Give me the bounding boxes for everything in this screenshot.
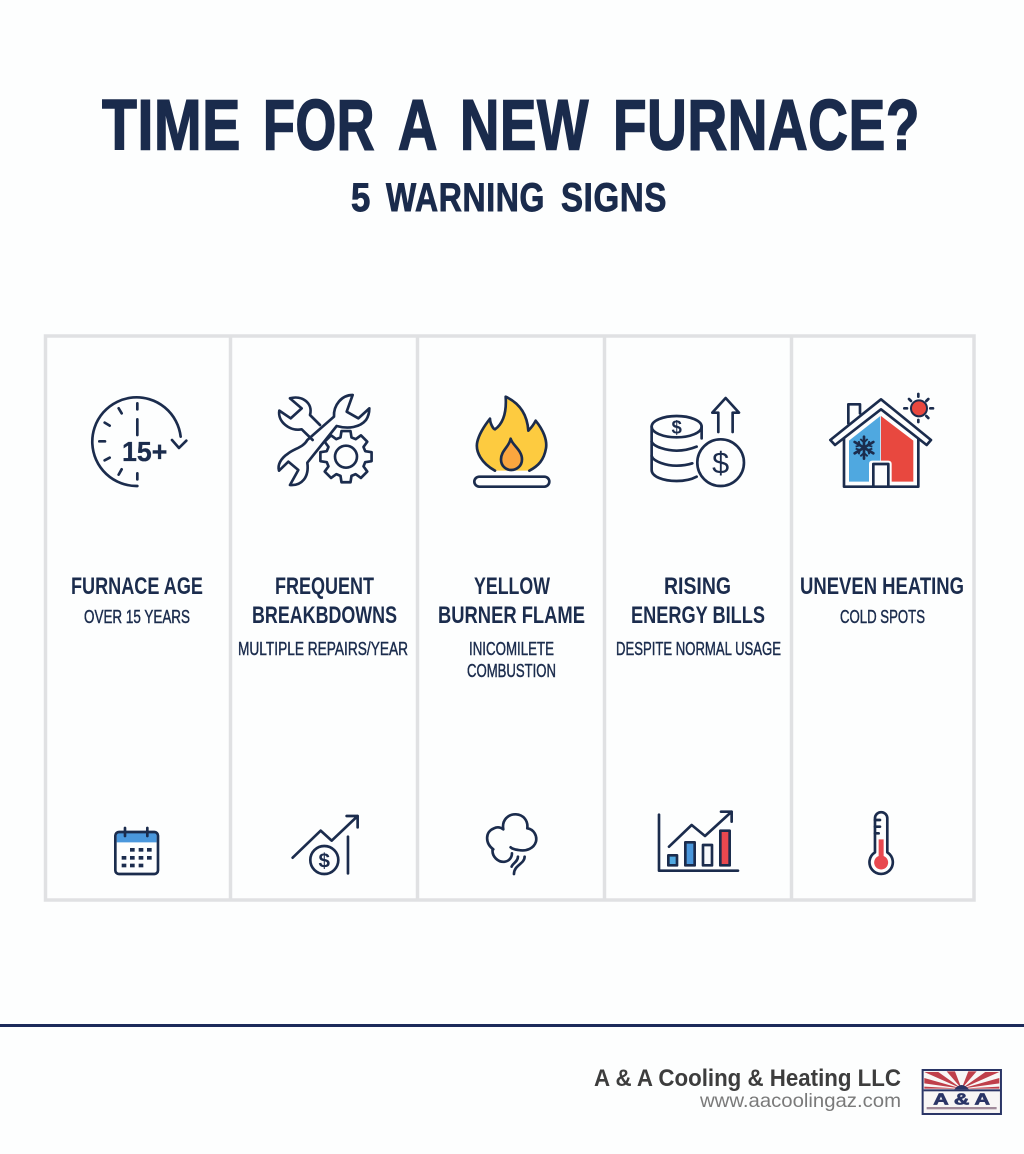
subtitle — [351, 176, 667, 220]
icon: coins and upward arrow: $ — [671, 416, 682, 437]
text: over 15 years: OVER 15 YEARS — [84, 606, 190, 627]
title: FURNACE? — [613, 86, 920, 166]
panel: yellow burner flame — [438, 397, 585, 874]
footer rule — [0, 1024, 1024, 1027]
heading: uneven heating: UNEVEN HEATING — [800, 573, 964, 600]
title: A — [398, 86, 438, 166]
icon: flame on burner — [474, 397, 549, 487]
text: multiple repairs: MULTIPLE REPAIRS/YEAR — [238, 638, 408, 659]
footer: website: www.aacoolingaz.com — [699, 1090, 901, 1112]
footer: company name: A & A Cooling & Heating LLC — [594, 1065, 901, 1092]
text: cold spots: COLD SPOTS — [840, 606, 925, 627]
icon: clock with 15+ — [92, 397, 186, 486]
title — [102, 86, 920, 166]
heading: yellow burner flame: YELLOW — [474, 573, 551, 600]
icon: rising cost arrow — [293, 816, 358, 874]
icon: thermometer — [869, 812, 893, 874]
panel: five-column grid frame — [46, 336, 974, 900]
heading: yellow burner flame: BURNER FLAME — [438, 602, 585, 629]
icon: bar chart with trend arrow — [659, 812, 738, 871]
text: incomplete combustion: INICOMILETE — [469, 638, 554, 659]
text: despite normal usage: DESPITE NORMAL USAGE — [616, 638, 781, 659]
icon: crossed wrenches and gear — [279, 395, 372, 485]
heading: yellow burner flame — [438, 573, 585, 629]
title: NEW — [460, 86, 589, 166]
panel: furnace age — [71, 397, 203, 874]
heading: rising energy bills — [631, 573, 765, 629]
heading: frequent breakdowns: FREQUENT — [275, 573, 374, 600]
heading: rising energy bills: RISING — [664, 573, 731, 600]
panel: uneven heating — [800, 394, 964, 874]
subtitle: SIGNS — [561, 176, 667, 220]
icon: calendar — [115, 828, 158, 874]
panel: frequent breakdowns — [238, 395, 408, 874]
heading: frequent breakdowns — [252, 573, 397, 629]
title: FOR — [263, 86, 375, 166]
subtitle: 5 — [351, 176, 371, 220]
panel: rising energy bills — [616, 398, 781, 871]
text: incomplete combustion: COMBUSTION — [467, 660, 556, 681]
logo — [923, 1070, 1001, 1114]
title: TIME — [102, 86, 241, 166]
text: incomplete combustion — [467, 638, 556, 681]
icon: coins and upward arrow — [652, 398, 744, 486]
heading: furnace age: FURNACE AGE — [71, 573, 203, 600]
heading: rising energy bills: ENERGY BILLS — [631, 602, 765, 629]
subtitle: WARNING — [386, 176, 545, 220]
icon: house half cold half hot with sun — [830, 394, 933, 487]
icon: storm cloud smoke — [487, 814, 536, 874]
icon: clock with 15+: 15+ — [122, 436, 167, 467]
icon: coins and upward arrow: $ — [712, 447, 729, 481]
icon: rising cost arrow: $ — [319, 850, 331, 873]
heading: frequent breakdowns: BREAKBDOWNS — [252, 602, 397, 629]
logo: A & A — [933, 1091, 990, 1108]
